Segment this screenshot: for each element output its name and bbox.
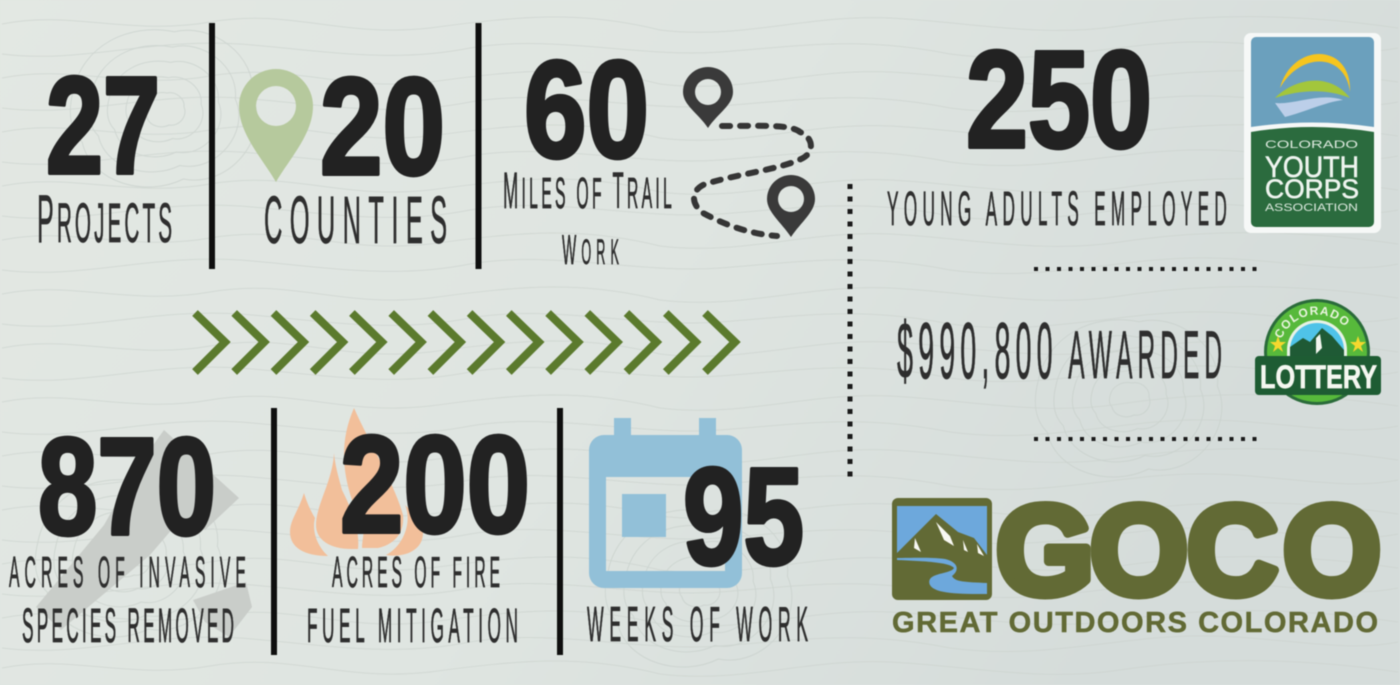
stat: 60 miles of trail work [503, 33, 672, 273]
stat: 870 acres of invasive species removed: 870 [38, 410, 216, 564]
stat: 250 young adults employed [887, 23, 1227, 236]
logo: Colorado Lottery [1254, 298, 1382, 406]
dotted connector line [848, 184, 852, 478]
award amount: $990,800 AWARDED [897, 306, 1222, 395]
stat: 27 projects: 27 [46, 49, 160, 203]
stat: 95 weeks of work: WEEKS OF WORK [587, 597, 808, 652]
stat: 870 acres of invasive species removed: SPECIES REMOVED [22, 598, 234, 653]
icon: grey axe [36, 430, 252, 637]
icon: blue calendar [589, 418, 742, 588]
icon: dashed trail route with two pins [683, 67, 815, 237]
logo: GOCO Great Outdoors Colorado: GOCO [996, 480, 1381, 621]
stat: 20 counties [264, 50, 447, 258]
logo: Colorado Lottery: COLORADO [1274, 306, 1350, 338]
logo: Colorado Youth Corps Association: CORPS [1265, 174, 1359, 204]
arrow: row of green chevrons [195, 313, 735, 372]
stat: 870 acres of invasive species removed: ACRES OF INVASIVE [9, 548, 246, 598]
stat: 20 counties: COUNTIES [264, 182, 447, 258]
logo: Colorado Youth Corps Association: COLORADO [1265, 139, 1359, 151]
stat: 200 acres of fire fuel mitigation [307, 408, 530, 653]
stat: 95 weeks of work [587, 440, 808, 652]
logo: Colorado Youth Corps Association: ASSOCIATION [1265, 202, 1358, 214]
stat: 60 miles of trail work: 60 [524, 33, 649, 187]
stat: 27 projects [37, 49, 172, 257]
stat: 200 acres of fire fuel mitigation: 200 [340, 408, 530, 562]
logo: Colorado Youth Corps Association [1244, 33, 1381, 233]
dotted separator [1034, 437, 1262, 441]
stat: 200 acres of fire fuel mitigation: FUEL MITIGATION [307, 598, 518, 653]
stat: 20 counties: 20 [320, 50, 445, 204]
divider lines [209, 23, 563, 655]
stat: 95 weeks of work: 95 [683, 440, 804, 594]
icon: orange flames [290, 408, 423, 556]
logo: GOCO Great Outdoors Colorado [892, 480, 1381, 639]
stat: 250 young adults employed: 250 [966, 23, 1152, 177]
stat: 870 acres of invasive species removed [9, 410, 246, 653]
logo: GOCO Great Outdoors Colorado: GREAT OUTDOORS COLORADO [892, 607, 1378, 639]
icon: green map pin [239, 69, 313, 182]
dotted separator [1034, 267, 1262, 271]
stat: 250 young adults employed: YOUNG ADULTS EMPLOYED [887, 181, 1227, 236]
stat: 60 miles of trail work: MILES OF TRAIL [503, 163, 672, 220]
stat: 200 acres of fire fuel mitigation: ACRES OF FIRE [332, 548, 500, 598]
stat: 27 projects: PROJECTS [37, 181, 172, 257]
stat: 60 miles of trail work: WORK [562, 225, 619, 273]
logo: Colorado Youth Corps Association: YOUTH [1265, 151, 1359, 184]
